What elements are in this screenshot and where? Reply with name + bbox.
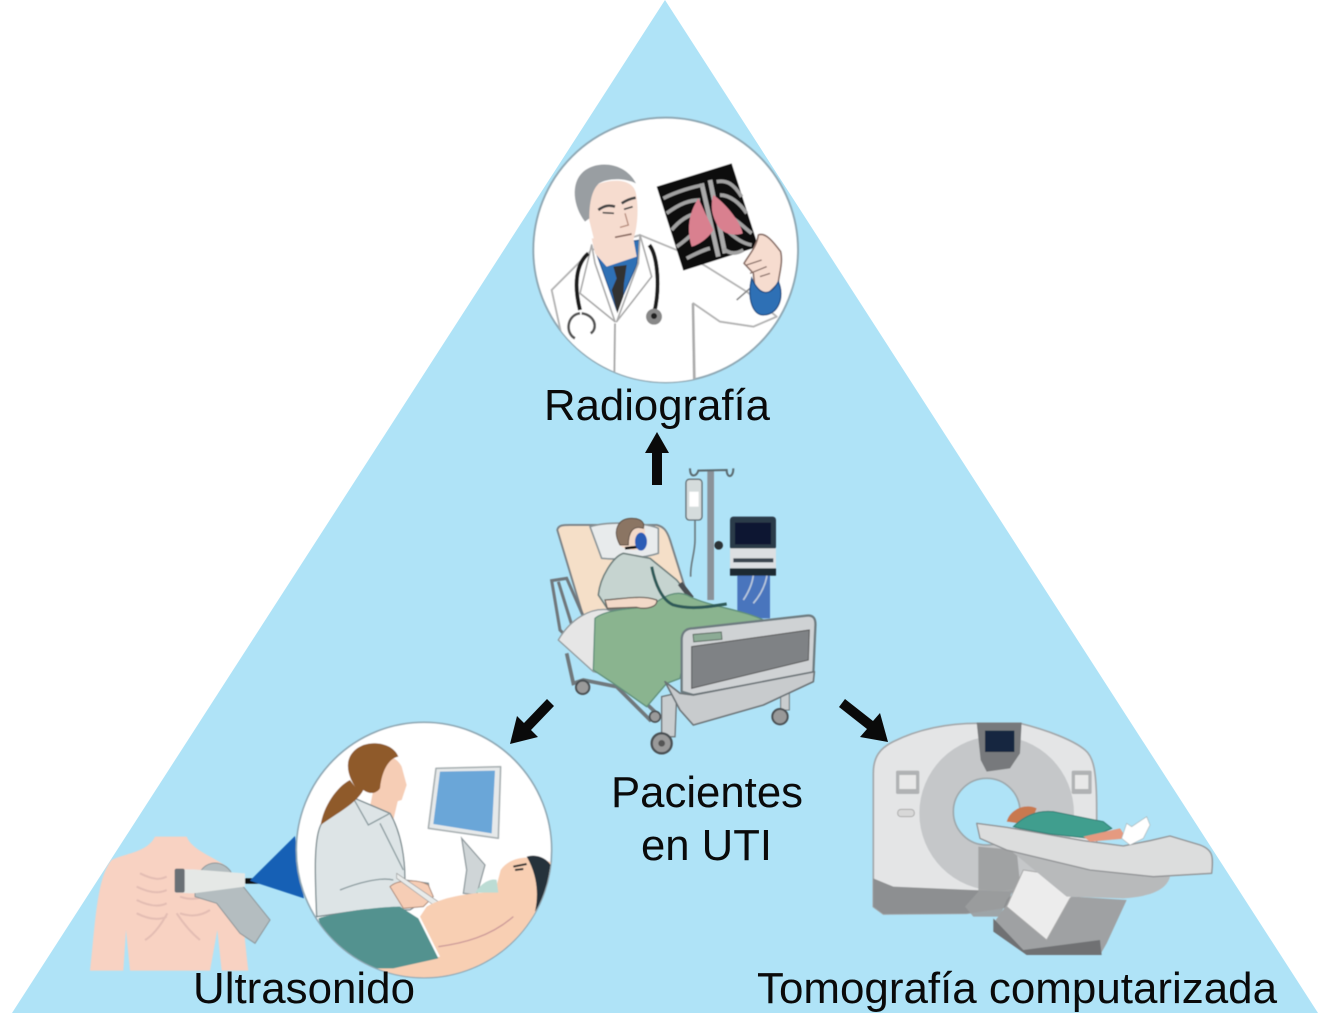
ultrasound circle background bbox=[296, 722, 552, 978]
title: Pacientes en UTI label bbox=[611, 769, 803, 870]
panel: ultrasound scene bbox=[90, 722, 553, 983]
arrow: down-left to ultrasound bbox=[510, 699, 554, 744]
icon: hand and blue cuff bbox=[744, 234, 781, 315]
icon: arm and breathing tube bbox=[605, 567, 727, 608]
icon: patient lying down bbox=[318, 856, 553, 983]
icon: monitor on arm bbox=[428, 767, 501, 895]
icon: chest x-ray film bbox=[657, 163, 758, 271]
icon: IV pole and bag bbox=[686, 468, 733, 600]
icon: pillow and patient upper body bbox=[590, 518, 692, 610]
icon: table base bbox=[965, 847, 1170, 955]
blue connector cone bbox=[250, 836, 304, 898]
arrow: up to radiography bbox=[645, 432, 669, 485]
title: Ultrasonido label: Ultrasonido bbox=[193, 965, 415, 1013]
icon: sonographer bbox=[315, 743, 438, 917]
icon: scanner gantry bbox=[873, 723, 1097, 914]
title: Pacientes en UTI label: en UTI bbox=[641, 822, 772, 870]
icon: ventilator bbox=[730, 517, 776, 618]
icon: green blanket bbox=[593, 593, 763, 707]
icon: doctor in white coat bbox=[552, 164, 777, 390]
icon: CT scanner with patient bbox=[873, 723, 1212, 955]
panel: radiography circle with doctor bbox=[533, 118, 798, 390]
icon: bed headboard and rail bbox=[552, 525, 687, 722]
icon: ultrasound exam scene bbox=[315, 743, 553, 983]
icon: patient on table bbox=[1007, 806, 1150, 845]
icon: table top bbox=[977, 823, 1212, 877]
icon: bed foot and wheels bbox=[652, 616, 815, 753]
circle background bbox=[533, 118, 798, 382]
arrow: down-right to CT scanner bbox=[839, 699, 888, 742]
icon: ICU patient in bed with IV and ventilator bbox=[552, 468, 815, 753]
icon: chest torso with probe bbox=[90, 837, 272, 971]
title: Pacientes en UTI label: Pacientes bbox=[611, 769, 803, 817]
title: Radiografía label: Radiografía bbox=[544, 382, 771, 430]
title: Tomografía computarizada label: Tomografía computarizada bbox=[757, 965, 1278, 1013]
